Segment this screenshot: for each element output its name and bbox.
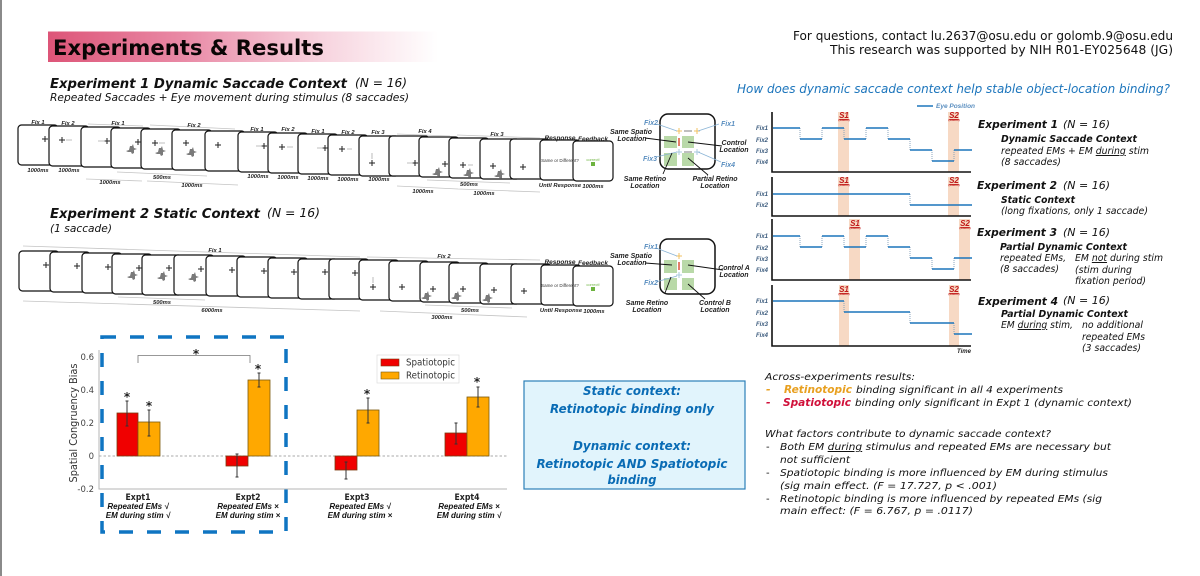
text block: contributing factors: - — [766, 468, 770, 479]
significance markers: * — [146, 399, 153, 413]
location diagram: experiment 1: Location — [630, 183, 660, 190]
eye trace panel: experiment 3: Fix2 — [756, 246, 769, 252]
experiment 3 description: Experiment 3 — [977, 226, 1057, 239]
location diagram: experiment 1: Fix4 — [721, 162, 735, 169]
eye trace panel: experiment 3: Fix4 — [756, 268, 769, 274]
experiment 1 description: repeated EMs + EM during stim — [1001, 146, 1149, 157]
bar chart: spatial congruency bias — [68, 347, 507, 520]
group labels: EM during stim √ — [437, 511, 502, 520]
experiment 2 description — [977, 179, 1148, 217]
significance markers: * — [124, 390, 131, 404]
experiment 2 description: Experiment 2 — [977, 179, 1057, 192]
group labels: EM during stim × — [216, 511, 281, 520]
trial timeline: experiment 1: Response — [544, 135, 576, 142]
eye position legend — [917, 103, 975, 110]
group labels: Expt1 — [126, 493, 151, 503]
axes: 0.6 — [80, 353, 94, 363]
location diagram: experiment 1: Control — [722, 140, 747, 147]
location diagram: experiment 1: Location — [700, 183, 730, 190]
eye trace panel: experiment 3: S2 — [960, 219, 970, 228]
experiment 2 description: Static Context — [1001, 195, 1075, 206]
trial timeline: experiment 2: Until Response — [540, 308, 583, 314]
trial timeline: experiment 1: 1000ms — [99, 180, 121, 186]
eye trace panel: experiment 3 — [756, 219, 972, 280]
significance markers — [124, 347, 481, 413]
trial timeline: experiment 1: Fix 1 — [111, 121, 125, 127]
trial timeline: experiment 1: Fix 3 — [490, 132, 504, 138]
experiment 3 description: (8 saccades) — [1000, 264, 1059, 275]
group labels: Repeated EMs √ — [107, 502, 169, 511]
frames: experiment 1 — [18, 125, 613, 181]
experiment 4 description: (N = 16) — [1063, 295, 1110, 307]
trial timeline: experiment 2: 6000ms — [201, 308, 223, 314]
experiment 4 description: (3 saccades) — [1082, 343, 1141, 354]
experiment 3 description — [977, 226, 1163, 287]
eye trace panel: experiment 1: (300ms) — [948, 118, 960, 122]
heading: experiment 1: Experiment 1 Dynamic Saccade Context — [50, 76, 348, 92]
location diagram: experiment 2 — [610, 239, 750, 314]
bars: retinotopic — [138, 380, 489, 456]
eye trace panel: experiment 4: (300ms) — [838, 292, 850, 296]
trial timeline: experiment 1: Same or Different? — [541, 158, 579, 163]
eye trace panel: experiment 4: S1 — [839, 285, 849, 294]
eye trace panel: experiment 2 — [756, 176, 972, 216]
location diagram: experiment 1: Same Retino — [624, 176, 667, 183]
callout: context summary: Retinotopic binding only — [550, 401, 715, 416]
trial timeline: experiment 1: 1000ms — [181, 183, 203, 189]
trial timeline: experiment 1: Fix 2 — [61, 121, 75, 127]
location diagram: experiment 1 — [610, 114, 749, 190]
eye trace panel: experiment 1: Fix2 — [756, 138, 769, 144]
trial timeline: experiment 1: Fix 2 — [281, 127, 295, 133]
trial timeline: experiment 1: Fix 2 — [341, 130, 355, 136]
group labels: EM during stim × — [328, 511, 393, 520]
chart legend: Retinotopic — [406, 370, 455, 382]
trial timeline: experiment 1: 1000ms — [412, 189, 434, 195]
trial timeline: experiment 1: Fix 3 — [371, 130, 385, 136]
location diagram: experiment 2: Location — [617, 260, 647, 267]
eye trace panel: experiment 3: Fix3 — [756, 257, 769, 263]
trial timeline: experiment 2: correct! — [586, 282, 600, 287]
heading: experiment 1: (N = 16) — [355, 76, 407, 90]
trial timeline: experiment 2: Same or Different? — [541, 283, 579, 288]
dashed highlight box — [102, 337, 286, 532]
trial timeline: experiment 1: Fix 1 — [311, 129, 325, 135]
experiment 3 description: fixation period) — [1075, 276, 1146, 287]
trial timeline: experiment 1: 1000ms — [27, 168, 49, 174]
text block: contributing factors: Spatiotopic binding is more influenced by EM during stimulus — [780, 468, 1108, 479]
trial timeline: experiment 1: 1000ms — [58, 168, 80, 174]
text block: across-experiments results: Retinotopic — [784, 384, 853, 396]
trial timeline: experiment 1: 500ms — [460, 182, 479, 188]
eye trace panel: experiment 1: Fix4 — [756, 160, 769, 166]
text block: contributing factors: main effect: (F = 6.767, p = .0117) — [780, 506, 973, 517]
axes: -0.2 — [77, 485, 94, 495]
location diagram: experiment 1: Location — [719, 147, 749, 154]
text block: across-experiments results — [764, 372, 1132, 409]
axes: 0.4 — [80, 386, 94, 396]
callout: context summary: Static context: — [583, 383, 681, 398]
group labels: Expt4 — [454, 493, 480, 503]
heading: experiment 1: Repeated Saccades + Eye movement during stimulus (8 saccades) — [50, 92, 409, 104]
axes: 0.2 — [80, 419, 94, 429]
trial timeline: experiment 2 — [19, 246, 613, 321]
group labels: Repeated EMs × — [217, 502, 279, 511]
group labels: Repeated EMs √ — [329, 502, 391, 511]
callout: context summary: Dynamic context: — [573, 438, 691, 453]
experiment 4 description — [978, 295, 1145, 354]
text block: contributing factors: Retinotopic binding is more influenced by repeated EMs (sig — [780, 494, 1102, 505]
location diagram: experiment 1: Same Spatio — [610, 129, 653, 136]
eye trace panel: experiment 2: (300ms) — [838, 183, 850, 187]
trial timeline: experiment 2: 500ms — [461, 308, 480, 314]
trial timeline: experiment 1: correct! — [586, 157, 600, 162]
trial timeline: experiment 2: Feedback — [578, 260, 608, 267]
chart legend: Spatiotopic — [406, 358, 455, 368]
trial timeline: experiment 1: Feedback — [578, 136, 608, 143]
trial timeline: experiment 1: 1000ms — [247, 174, 269, 180]
experiment 3 description: (stim during — [1075, 265, 1132, 276]
trial timeline: experiment 1: 1000ms — [337, 177, 359, 183]
experiment 1 description: (N = 16) — [1063, 119, 1110, 131]
eye trace panel: experiment 2: S2 — [949, 176, 959, 185]
experiment 4 description: repeated EMs — [1082, 332, 1145, 343]
heading: experiment 2 — [50, 206, 320, 235]
trial timeline: experiment 1: 1000ms — [582, 184, 604, 190]
trial timeline: experiment 1: Fix 2 — [187, 123, 201, 129]
location diagram: experiment 2: Same Spatio — [610, 253, 653, 260]
trial timeline: experiment 1: 1000ms — [277, 175, 299, 181]
eye trace panel: experiment 3: (300ms) — [959, 226, 971, 230]
eye trace panel: experiment 3: (300ms) — [849, 226, 861, 230]
trial timeline: experiment 1: Fix 4 — [418, 129, 432, 135]
text block: contributing factors: (sig main effect. (F = 17.727, p < .001) — [780, 481, 997, 492]
contact and funding text — [793, 28, 1173, 57]
location diagram: experiment 2: Fix2 — [644, 280, 658, 287]
text block: across-experiments results: - — [766, 396, 771, 409]
text block: contributing factors: - — [766, 442, 770, 453]
trial timeline: experiment 1: 1000ms — [473, 191, 495, 197]
chart legend — [377, 355, 459, 383]
text block: contributing factors: Both EM during stimulus and repeated EMs are necessary but — [780, 442, 1112, 453]
location diagram: experiment 2: Control A — [718, 265, 750, 272]
trial timeline: experiment 1: 1000ms — [307, 176, 329, 182]
heading: experiment 2: (N = 16) — [267, 206, 320, 220]
trial timeline: experiment 1: 500ms — [153, 175, 172, 181]
eye trace panel: experiment 2: S1 — [839, 176, 849, 185]
axes: 0 — [89, 452, 94, 462]
axes: Spatial Congruency Bias — [68, 364, 80, 482]
experiment 2 description: (long fixations, only 1 saccade) — [1001, 206, 1148, 217]
location diagram: experiment 2: Location — [719, 272, 749, 279]
trial timeline: experiment 1: Fix 1 — [250, 127, 264, 133]
eye trace panel: experiment 1: Fix1 — [756, 126, 769, 132]
experiment 1 description: (8 saccades) — [1001, 157, 1061, 168]
location diagram: experiment 2: Location — [632, 307, 662, 314]
experiment 2 description: (N = 16) — [1063, 180, 1110, 192]
contact and funding text: For questions, contact lu.2637@osu.edu or golomb.9@osu.edu — [793, 28, 1173, 43]
text block: across-experiments results: Spatiotopic — [783, 397, 852, 409]
experiment 4 description: Partial Dynamic Context — [1001, 309, 1128, 320]
significance markers: * — [364, 387, 371, 401]
eye trace panel: experiment 4: (300ms) — [948, 292, 960, 296]
eye trace panel: experiment 1: S2 — [949, 111, 959, 120]
question heading: How does dynamic saccade context help stable object-location binding? — [737, 81, 1170, 96]
contact and funding text: This research was supported by NIH R01-EY025648 (JG) — [829, 42, 1173, 57]
significance markers: * — [474, 375, 481, 389]
experiment 1 description: Experiment 1 — [978, 118, 1058, 131]
significance markers: * — [255, 362, 262, 376]
eye trace panel: experiment 2: Fix1 — [756, 192, 769, 198]
callout: context summary: binding — [608, 472, 657, 487]
location diagram: experiment 2: Same Retino — [626, 300, 669, 307]
text block: contributing factors: What factors contribute to dynamic saccade context? — [765, 429, 1052, 440]
heading: experiment 2: (1 saccade) — [50, 223, 112, 235]
experiment 3 description: (N = 16) — [1063, 227, 1110, 239]
trial timeline: experiment 2: 500ms — [153, 300, 172, 306]
eye trace panel: experiment 4 — [756, 285, 972, 355]
text block: contributing factors: - — [766, 494, 770, 505]
experiment 4 description: no additional — [1082, 320, 1143, 331]
location diagram: experiment 1: Partial Retino — [692, 176, 738, 183]
significance markers: * — [193, 347, 200, 361]
trial timeline: experiment 1: 1000ms — [368, 177, 390, 183]
group labels — [106, 493, 502, 520]
text block: across-experiments results: - — [766, 383, 771, 396]
frames: experiment 2 — [19, 251, 613, 306]
trial timeline: experiment 1: Until Response — [539, 183, 582, 189]
group labels: Expt3 — [344, 493, 370, 503]
text block: across-experiments results: Across-experiments results: — [764, 372, 915, 383]
experiment 3 description: Partial Dynamic Context — [1000, 242, 1127, 253]
experiment 1 description: Dynamic Saccade Context — [1001, 134, 1137, 145]
eye trace panel: experiment 2: (300ms) — [948, 183, 960, 187]
eye trace panel: experiment 4: Fix3 — [756, 322, 769, 328]
axes — [68, 350, 507, 495]
trial timeline: experiment 1 — [18, 120, 613, 197]
callout: context summary — [524, 381, 745, 489]
group labels: Repeated EMs × — [438, 502, 500, 511]
location diagram: experiment 2: Control B — [699, 300, 731, 307]
eye trace panel: experiment 3: Fix1 — [756, 234, 769, 240]
text block: across-experiments results: binding significant in all 4 experiments — [856, 385, 1063, 396]
location diagram: experiment 1: Fix2 — [644, 120, 658, 127]
bars: spatiotopic — [117, 413, 467, 470]
text block: across-experiments results: binding only significant in Expt 1 (dynamic context) — [855, 398, 1132, 409]
eye trace panel: experiment 4: Fix4 — [756, 333, 769, 339]
eye trace panel: experiment 2: Fix2 — [756, 203, 769, 209]
trial timeline: experiment 2: 3000ms — [431, 315, 453, 321]
text block: contributing factors: not sufficient — [780, 455, 851, 466]
eye trace panel: experiment 1 — [756, 111, 972, 172]
callout: context summary: Retinotopic AND Spatiotopic — [536, 456, 728, 471]
location diagram: experiment 2: Location — [700, 307, 730, 314]
trial timeline: experiment 1: Fix 1 — [31, 120, 45, 126]
location diagram: experiment 2: Fix1 — [644, 244, 658, 251]
error bars — [126, 373, 480, 479]
text block: contributing factors — [765, 429, 1112, 517]
title banner — [48, 32, 438, 62]
experiment 1 description — [978, 118, 1149, 168]
eye trace panel: experiment 4: Fix1 — [756, 299, 769, 305]
experiment 3 description: repeated EMs, — [1000, 253, 1066, 264]
trial timeline: experiment 2: Response — [544, 259, 576, 266]
heading: experiment 1 — [50, 76, 409, 104]
trial timeline: experiment 2: Fix 2 — [437, 254, 451, 260]
heading: experiment 2: Experiment 2 Static Context — [50, 206, 261, 222]
trial timeline: experiment 2: 1000ms — [583, 309, 605, 315]
eye trace panel: experiment 1: (300ms) — [838, 118, 850, 122]
location diagram: experiment 1: Fix1 — [721, 121, 735, 128]
eye trace panel: experiment 1: S1 — [839, 111, 849, 120]
eye trace panel: experiment 1: Fix3 — [756, 149, 769, 155]
group labels: Expt2 — [236, 493, 261, 503]
title banner: Experiments & Results — [53, 36, 324, 61]
experiment 3 description: EM not during stim — [1075, 253, 1163, 264]
eye trace panel: experiment 3: S1 — [850, 219, 860, 228]
eye trace panel: experiment 4: Fix2 — [756, 311, 769, 317]
experiment 4 description: EM during stim, — [1001, 320, 1073, 331]
eye position legend: Eye Position — [936, 103, 975, 110]
group labels: EM during stim √ — [106, 511, 171, 520]
location diagram: experiment 1: Location — [617, 136, 647, 143]
eye trace panel: experiment 4: Time — [957, 349, 972, 355]
experiment 4 description: Experiment 4 — [978, 295, 1058, 308]
eye trace panel: experiment 4: S2 — [949, 285, 959, 294]
location diagram: experiment 1: Fix3 — [643, 156, 657, 163]
trial timeline: experiment 2: Fix 1 — [208, 248, 222, 254]
